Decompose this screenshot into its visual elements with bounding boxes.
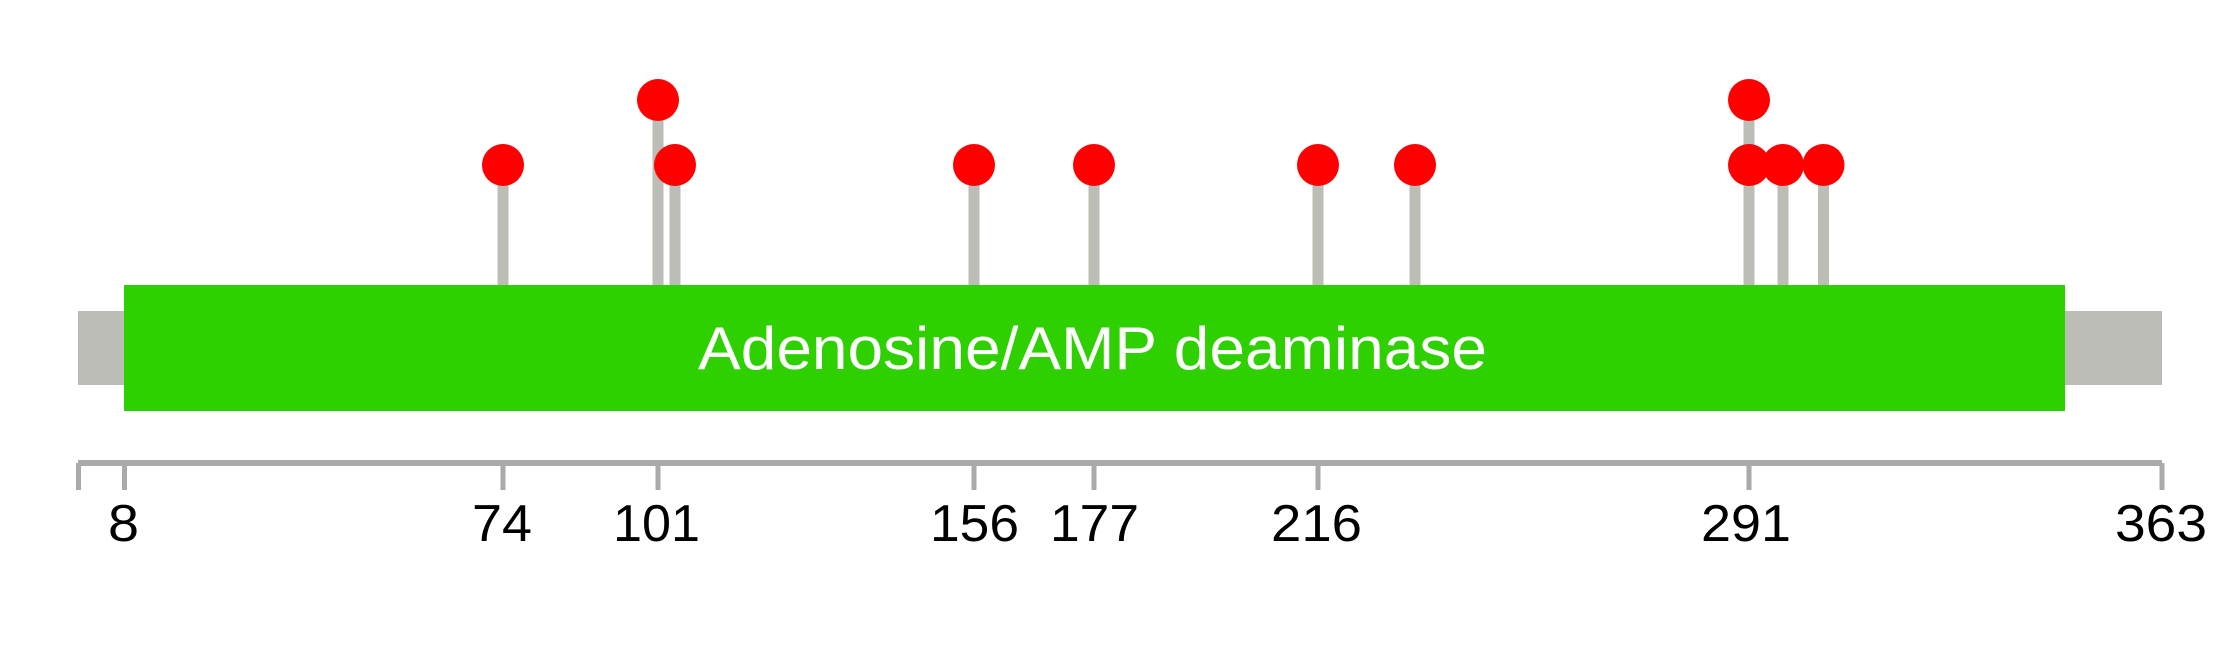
axis labels: 177 <box>1050 495 1139 553</box>
axis labels: 101 <box>613 495 700 553</box>
domain: Adenosine/AMP deaminase <box>124 285 2065 411</box>
axis labels: 156 <box>930 495 1019 553</box>
axis labels: 74 <box>472 495 532 553</box>
protein backbone <box>78 311 2162 385</box>
axis labels: 363 <box>2115 495 2207 553</box>
axis labels: 291 <box>1701 495 1791 553</box>
axis labels: 216 <box>1271 495 1362 553</box>
axis labels: 8 <box>108 495 139 553</box>
axis labels <box>108 495 2207 553</box>
mutation markers <box>482 79 1844 186</box>
domain label: Adenosine/AMP deaminase <box>698 315 1487 382</box>
mutation stems <box>498 100 1829 285</box>
position axis <box>76 460 2207 553</box>
